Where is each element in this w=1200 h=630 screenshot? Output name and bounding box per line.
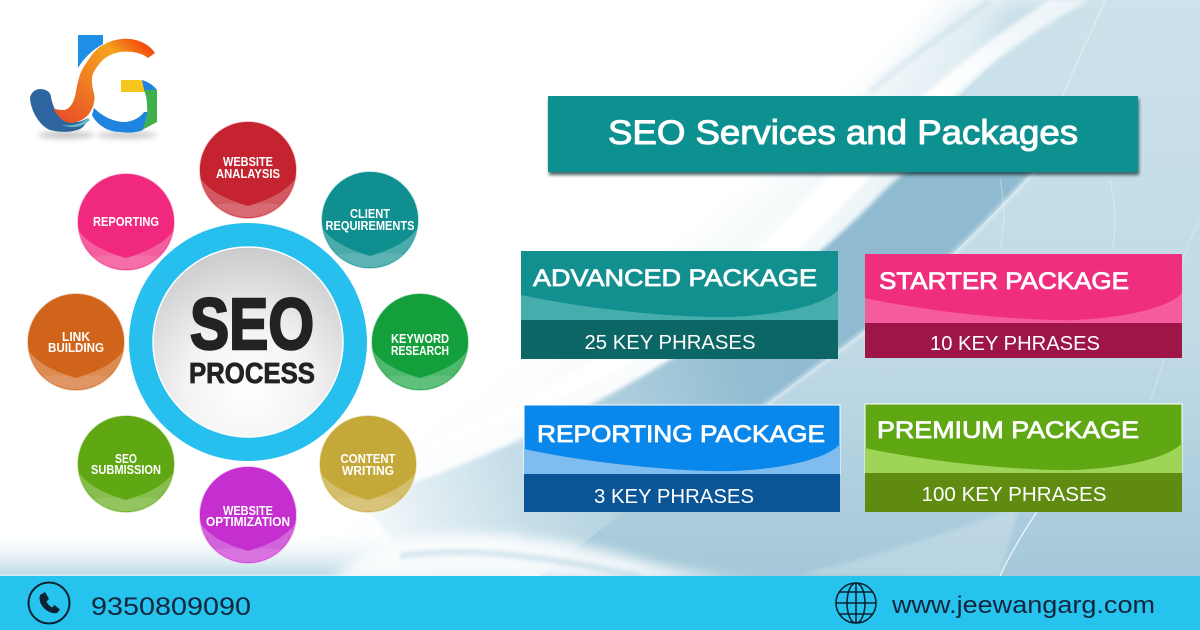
- node: link building: [28, 294, 124, 390]
- package: starter: STARTER PACKAGE: [879, 268, 1129, 295]
- package: advanced: 25 KEY PHRASES: [584, 332, 756, 354]
- package: premium: [865, 404, 1182, 512]
- title banner: [548, 96, 1138, 172]
- title banner: SEO Services and Packages: [608, 114, 1078, 152]
- icon: phone: [28, 582, 70, 624]
- package: premium: 100 KEY PHRASES: [922, 484, 1106, 506]
- website url: www.jeewangarg.com: [891, 592, 1155, 619]
- logo shadow: [38, 132, 94, 138]
- node: link building: BUILDING: [48, 341, 104, 355]
- node: keyword research: RESEARCH: [391, 344, 449, 358]
- node: website analysis: [200, 122, 296, 218]
- central ring: [129, 223, 367, 461]
- node: link building: LINK: [62, 330, 90, 344]
- process diagram: [28, 122, 468, 564]
- label: SEO: SEO: [190, 285, 314, 365]
- node: website optimization: OPTIMIZATION: [206, 515, 290, 529]
- phone number: 9350809090: [91, 593, 251, 621]
- central disc: [153, 247, 343, 437]
- package: advanced: [521, 251, 838, 359]
- node: reporting: [78, 174, 174, 270]
- label: PROCESS: PROCESS: [189, 358, 315, 390]
- node: client requirements: REQUIREMENTS: [326, 219, 414, 233]
- node: seo submission: SUBMISSION: [91, 463, 161, 477]
- node: website analysis: WEBSITE: [223, 155, 273, 169]
- node: content writing: CONTENT: [340, 452, 396, 466]
- node: content writing: [320, 416, 416, 512]
- node: content writing: WRITING: [342, 464, 394, 478]
- logo: JG: [30, 35, 157, 138]
- package: starter: [865, 254, 1182, 358]
- node: client requirements: [322, 172, 418, 268]
- node: reporting: REPORTING: [93, 215, 159, 229]
- package: premium: PREMIUM PACKAGE: [877, 417, 1139, 444]
- package: reporting: REPORTING PACKAGE: [537, 421, 825, 448]
- node: keyword research: KEYWORD: [391, 332, 449, 346]
- node: website optimization: WEBSITE: [223, 504, 273, 518]
- node: seo submission: SEO: [115, 452, 137, 466]
- node: keyword research: [372, 294, 468, 390]
- package: advanced: ADVANCED PACKAGE: [533, 265, 817, 292]
- package: starter: 10 KEY PHRASES: [930, 333, 1100, 355]
- package: reporting: 3 KEY PHRASES: [594, 486, 754, 508]
- footer bar: [0, 576, 1200, 630]
- node: website optimization: [200, 466, 296, 564]
- package: reporting: [524, 405, 840, 512]
- icon: globe: [836, 583, 876, 623]
- node: website analysis: ANALAYSIS: [216, 167, 280, 181]
- node: seo submission: [78, 416, 174, 512]
- node: client requirements: CLIENT: [350, 207, 390, 221]
